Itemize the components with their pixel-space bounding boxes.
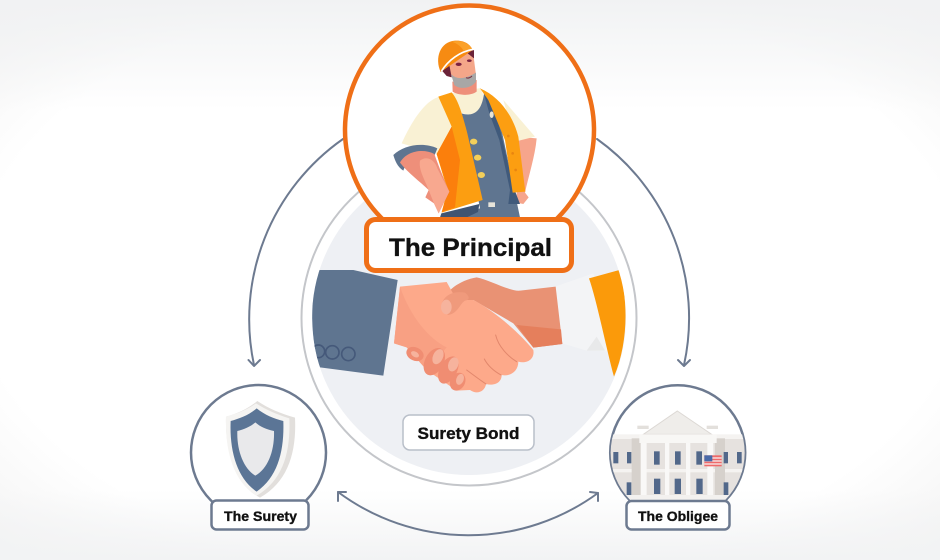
orange cuff [589, 270, 626, 377]
neck [452, 80, 477, 95]
columns [640, 443, 714, 495]
eyes [456, 59, 472, 66]
thumb [443, 293, 466, 315]
shirt sleeve right [555, 273, 613, 352]
overalls [440, 93, 520, 217]
label: the principal [366, 220, 572, 270]
label: surety bond: Surety Bond [418, 425, 520, 443]
illustration: handshake [312, 270, 626, 393]
icon: shield [226, 401, 295, 498]
flag [704, 455, 722, 466]
label: the obligee [626, 501, 730, 530]
panel: the surety [191, 385, 326, 530]
finger creases [467, 335, 517, 384]
illustration: construction worker [393, 41, 537, 217]
left arm [393, 145, 437, 171]
label: the principal: The Principal [389, 234, 552, 262]
suit sleeve left [312, 270, 398, 376]
darker hand [443, 277, 562, 348]
arrow: surety and obligee double-headed [338, 492, 598, 535]
beard [451, 73, 476, 88]
fingers [406, 347, 466, 391]
lighter hand [394, 282, 534, 392]
buttons [470, 139, 485, 178]
label: the surety [212, 500, 308, 530]
icon: white house [607, 411, 750, 502]
shirt [402, 97, 453, 154]
arrow: principal to surety [248, 139, 343, 366]
face [447, 49, 476, 87]
pediment [643, 411, 712, 434]
helmet [438, 41, 473, 72]
windows [613, 451, 742, 495]
arrow: principal to obligee [597, 139, 690, 366]
label: surety bond [403, 415, 534, 450]
panel: surety bond circle [300, 191, 638, 486]
label: the obligee: The Obligee [638, 508, 718, 524]
bottom band [440, 204, 479, 217]
label: the surety: The Surety [224, 508, 297, 524]
vest [437, 92, 483, 213]
hair [442, 65, 452, 77]
right arm [517, 137, 537, 204]
panel: the obligee [607, 385, 750, 530]
panel: the principal [345, 6, 594, 270]
